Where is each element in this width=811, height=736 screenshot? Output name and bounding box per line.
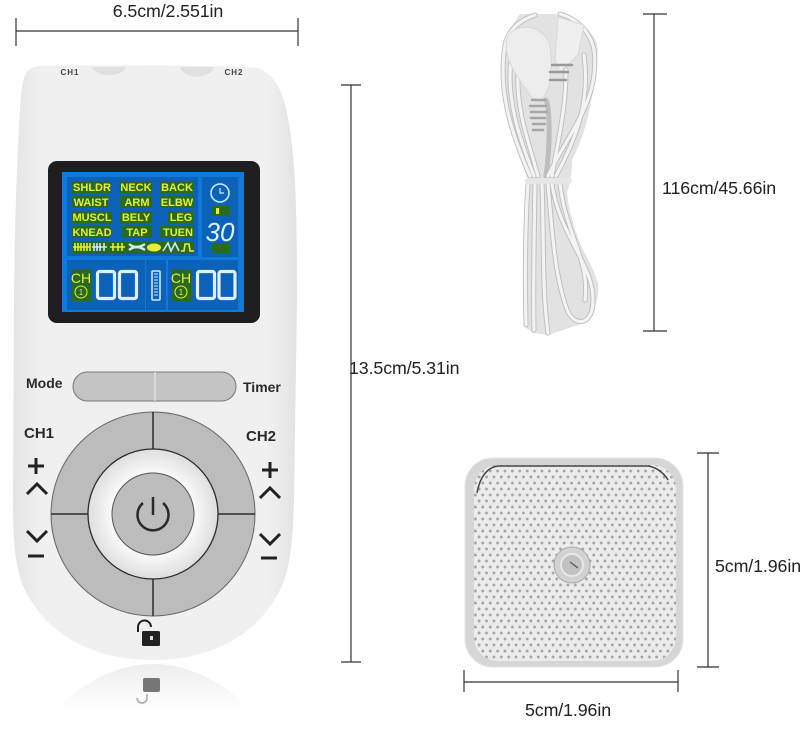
button: power [112, 473, 194, 555]
panel: channel 1 level: 1 [79, 288, 84, 297]
panel: body parts and modes: BACK [161, 182, 193, 194]
panel: body parts and modes: ELBW [161, 197, 194, 209]
dimension: cable length [643, 14, 776, 331]
label: Timer: Timer [243, 379, 281, 395]
device reflection [56, 664, 250, 710]
connector: strain relief [530, 100, 547, 130]
icon: unlock [138, 620, 160, 646]
panel: body parts and modes: TAP [126, 227, 148, 239]
snap connector [554, 547, 590, 583]
panel: channel 1 level [67, 260, 145, 310]
cable silhouette [504, 14, 598, 335]
dimension: device height [341, 85, 459, 662]
port: CH1: CH1 [60, 68, 80, 77]
port: CH2 [180, 67, 244, 77]
panel: timer [202, 177, 238, 257]
panel: body parts and modes: KNEAD [72, 227, 112, 239]
label: Mode: Mode [26, 375, 63, 391]
panel: body parts and modes: SHLDR [73, 182, 111, 194]
panel: body parts and modes: NECK [120, 182, 152, 194]
panel: body parts and modes: BELY [122, 212, 151, 224]
connector: round plug [506, 27, 551, 100]
control dial [51, 412, 255, 616]
panel: timer: 30 [206, 217, 235, 247]
cable [503, 14, 598, 335]
panel: body parts and modes [67, 177, 198, 256]
electrode pad [465, 458, 683, 667]
panel: channel 2 level: CH [171, 270, 191, 286]
port: CH1 [60, 67, 126, 77]
panel: body parts and modes: MUSCL [72, 212, 112, 224]
panel: channel 1 level: CH [71, 270, 91, 286]
panel: body parts and modes: LEG [170, 212, 192, 224]
icons: CH2 plus and minus controls [260, 462, 280, 558]
dimension: pad height: 5cm/1.96in [715, 556, 801, 576]
button: Mode and Timer [73, 372, 236, 401]
label: CH1: CH1 [24, 425, 54, 442]
dimension: pad width: 5cm/1.96in [525, 700, 611, 720]
panel: channel 2 level [168, 260, 238, 310]
dimension: pad height [697, 453, 801, 667]
panel: body parts and modes: ARM [124, 197, 150, 209]
panel: battery [146, 260, 166, 310]
waveform icons [73, 243, 194, 252]
panel: body parts and modes: TUEN [163, 227, 193, 239]
panel: body parts and modes: WAIST [74, 197, 109, 209]
port: CH2: CH2 [224, 68, 244, 77]
dimension: device width [16, 1, 298, 46]
dimension: device width: 6.5cm/2.551in [113, 1, 223, 21]
device body [13, 65, 297, 660]
dimension: device height: 13.5cm/5.31in [349, 358, 459, 378]
dimension: pad width [464, 670, 678, 720]
panel: channel 2 level: 1 [179, 288, 184, 297]
dimension: cable length: 116cm/45.66in [662, 178, 776, 198]
icons: CH1 plus and minus controls [27, 458, 47, 556]
label: CH2: CH2 [246, 428, 276, 445]
connector: angled plug [555, 17, 584, 72]
LCD screen [48, 161, 260, 323]
